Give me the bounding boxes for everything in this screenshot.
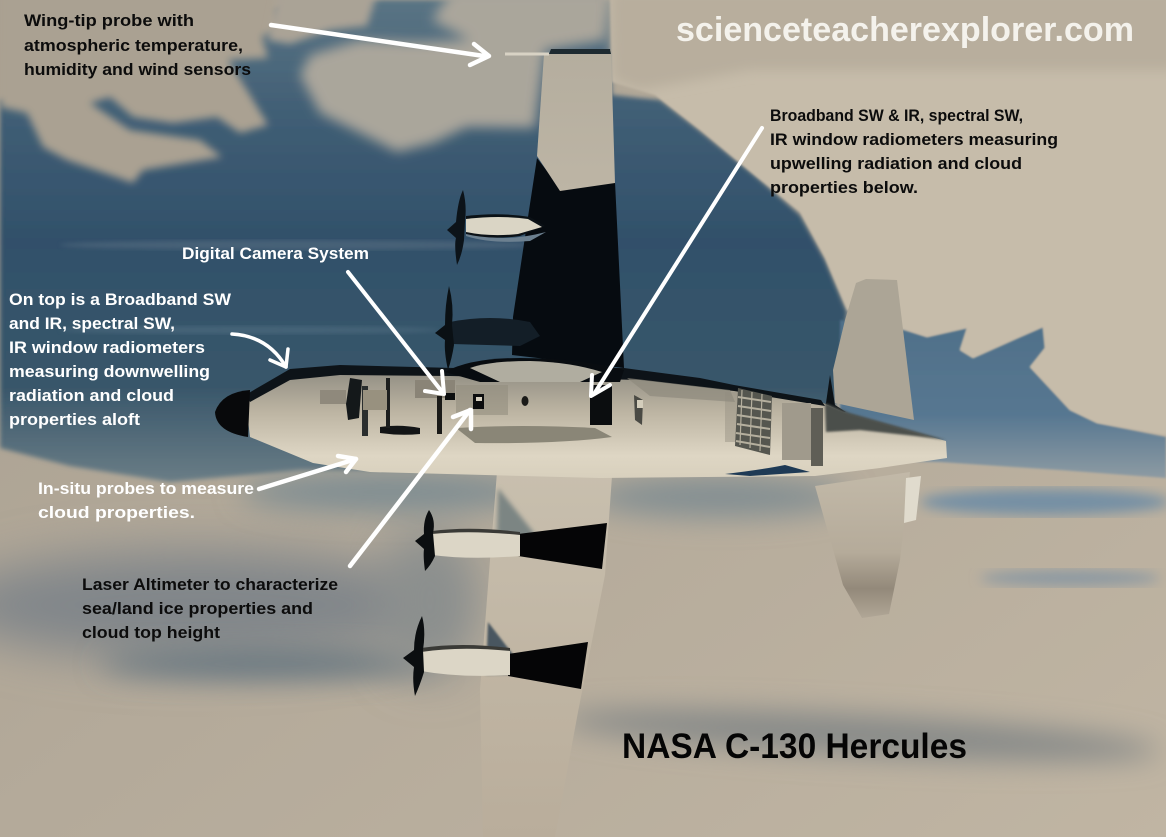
far wing xyxy=(537,50,615,191)
upper tailplane xyxy=(833,279,914,420)
near lower wing xyxy=(480,472,612,837)
wing-tip probe xyxy=(505,52,549,56)
outer far engine xyxy=(447,190,546,265)
label: digital camera system: Digital Camera System xyxy=(182,245,369,263)
label: upwelling radiometers: properties below. xyxy=(770,179,918,197)
arrow: in-situ probes xyxy=(259,456,356,489)
label: wing-tip probe: humidity and wind sensors xyxy=(24,61,251,79)
wing outer engine xyxy=(403,616,588,696)
label: upwelling radiometers: Broadband SW & IR, spectral SW, xyxy=(770,107,1023,125)
arrow: wing-tip probe xyxy=(271,25,489,65)
white tail probe xyxy=(904,476,921,523)
fuselage markings xyxy=(320,378,823,476)
label: in-situ probes: cloud properties. xyxy=(38,504,195,522)
arrow: laser altimeter xyxy=(350,410,471,566)
label: downwelling radiometers: On top is a Broadband SW xyxy=(9,291,231,309)
wing inner engine xyxy=(415,510,607,571)
label: laser altimeter: sea/land ice properties and xyxy=(82,600,313,618)
lower clouds xyxy=(0,550,450,660)
label: downwelling radiometers: and IR, spectral SW, xyxy=(9,315,175,333)
wing wedge shadows xyxy=(497,488,538,538)
title: NASA C-130 Hercules xyxy=(622,727,967,766)
label: laser altimeter: cloud top height xyxy=(82,624,221,642)
tail cone dark shading xyxy=(825,403,946,440)
arrow: curved to top radiometers xyxy=(232,334,288,367)
louvered radiator panel xyxy=(735,388,772,455)
dark sky right of tail xyxy=(840,320,1166,478)
arrow: digital camera xyxy=(348,272,444,394)
lower tailplane xyxy=(815,472,910,618)
cloud: top middle xyxy=(268,0,378,44)
fuselage dark dorsal edge xyxy=(247,365,825,406)
streak cloud bands xyxy=(60,240,540,250)
label: downwelling radiometers: radiation and cloud xyxy=(9,387,174,405)
cloud: right bank xyxy=(610,0,1166,437)
wing-root fairing xyxy=(445,358,624,382)
arrow: upwelling radiometers xyxy=(591,128,762,396)
label: in-situ probes: In-situ probes to measure xyxy=(38,480,254,498)
cloud: centre xyxy=(300,0,612,152)
dark stormy sky mass xyxy=(0,0,847,482)
fuselage xyxy=(245,367,947,478)
watermark heading: scienceteacherexplorer.com xyxy=(676,11,1134,49)
far wing dark underside shadow xyxy=(512,158,624,368)
cloud: top left xyxy=(0,0,282,183)
label: downwelling radiometers: properties aloft xyxy=(9,411,141,429)
label: upwelling radiometers: IR window radiometers measuring xyxy=(770,131,1058,149)
label: upwelling radiometers: upwelling radiation and cloud xyxy=(770,155,1022,173)
label: laser altimeter: Laser Altimeter to characterize xyxy=(82,576,338,594)
inner far engine xyxy=(435,286,540,370)
label: wing-tip probe: Wing-tip probe with xyxy=(24,12,194,30)
label: wing-tip probe: atmospheric temperature, xyxy=(24,37,243,55)
black nose radome xyxy=(215,390,250,437)
aircraft xyxy=(215,49,947,837)
label: downwelling radiometers: measuring downwelling xyxy=(9,363,210,381)
label: downwelling radiometers: IR window radiometers xyxy=(9,339,205,357)
